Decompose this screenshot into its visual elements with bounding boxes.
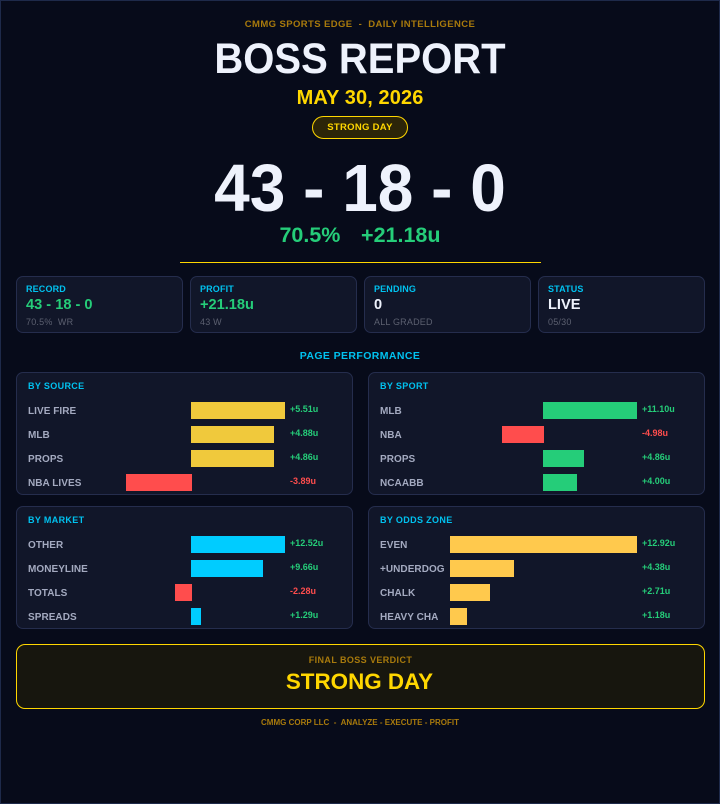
- verdict banner: [16, 644, 705, 709]
- panel: by source: -3.89u: [290, 476, 316, 486]
- panel: by sport: -4.98u: [642, 428, 668, 438]
- stat card: status: [538, 276, 705, 333]
- panel: by source: MLB: [28, 430, 50, 441]
- panel: by sport: [368, 372, 705, 495]
- panel: by odds zone: +1.18u: [642, 610, 670, 620]
- panel: by odds zone: +4.38u: [642, 562, 670, 572]
- panel: by source: +4.86u: [290, 452, 318, 462]
- panel: by sport: +11.10u: [642, 404, 675, 414]
- panel: by market: TOTALS: [28, 588, 67, 599]
- stat card: profit: [190, 276, 357, 333]
- badge: Strong Day: STRONG DAY: [327, 122, 393, 133]
- panel: by source: BY SOURCE: [28, 381, 84, 391]
- headline win rate and profit: 70.5% +21.18u: [279, 223, 441, 247]
- stat card: pending: 0: [374, 297, 382, 313]
- panel: by odds zone: HEAVY CHA: [380, 612, 438, 623]
- panel: by market: -2.28u: [290, 586, 316, 596]
- panel: by odds zone: BY ODDS ZONE: [380, 515, 453, 525]
- stat card: profit: PROFIT: [200, 284, 234, 294]
- stat card: status: LIVE: [548, 297, 580, 313]
- panel: by source: NBA LIVES: [28, 478, 81, 489]
- panel: by odds zone: [368, 506, 705, 629]
- stat card: record: RECORD: [26, 284, 66, 294]
- stat card: status: STATUS: [548, 284, 584, 294]
- gold divider: [180, 262, 541, 263]
- panel: by sport: NCAABB: [380, 478, 424, 489]
- panel: by sport: BY SPORT: [380, 381, 429, 391]
- panel: by market: SPREADS: [28, 612, 77, 623]
- panel: by sport: +4.86u: [642, 452, 670, 462]
- panel: by odds zone: EVEN: [380, 540, 407, 551]
- stat card: profit: +21.18u: [200, 297, 254, 313]
- stat card: status: 05/30: [548, 317, 572, 327]
- eyebrow: CMMG Sports Edge: CMMG SPORTS EDGE - DAILY INTELLIGENCE: [245, 19, 475, 30]
- panel: by sport: MLB: [380, 406, 402, 417]
- panel: by market: +9.66u: [290, 562, 318, 572]
- panel: by market: +12.52u: [290, 538, 323, 548]
- panel: by odds zone: +2.71u: [642, 586, 670, 596]
- verdict label: FINAL BOSS VERDICT: [309, 655, 412, 665]
- stat card: pending: PENDING: [374, 284, 416, 294]
- panel: by odds zone: CHALK: [380, 588, 415, 599]
- footer: CMMG CORP LLC - ANALYZE - EXECUTE - PROFIT: [261, 718, 459, 727]
- panel: by source: LIVE FIRE: [28, 406, 76, 417]
- panel: by odds zone: +UNDERDOG: [380, 564, 445, 575]
- stat card: record: [16, 276, 183, 333]
- panel: by odds zone: +12.92u: [642, 538, 675, 548]
- panel: by sport: NBA: [380, 430, 402, 441]
- verdict text: STRONG DAY: [286, 669, 433, 694]
- panel: by source: +4.88u: [290, 428, 318, 438]
- headline record: 43 - 18 - 0: [214, 150, 506, 226]
- panel: by sport: PROPS: [380, 454, 415, 465]
- stat card: record: 70.5% WR: [26, 317, 73, 327]
- panel: by market: BY MARKET: [28, 515, 84, 525]
- stat card: pending: [364, 276, 531, 333]
- panel: by market: MONEYLINE: [28, 564, 88, 575]
- panel: by market: +1.29u: [290, 610, 318, 620]
- panel: by source: [16, 372, 353, 495]
- stat card: pending: ALL GRADED: [374, 317, 433, 327]
- badge: Strong Day: [312, 116, 408, 139]
- panel: by source: PROPS: [28, 454, 63, 465]
- panel: by sport: +4.00u: [642, 476, 670, 486]
- date: MAY 30, 2026: [297, 87, 423, 109]
- panel: by source: +5.51u: [290, 404, 318, 414]
- stat card: record: 43 - 18 - 0: [26, 297, 93, 313]
- stat card: profit: 43 W: [200, 317, 222, 327]
- section heading: page performance: PAGE PERFORMANCE: [300, 350, 420, 362]
- panel: by market: [16, 506, 353, 629]
- panel: by market: OTHER: [28, 540, 63, 551]
- title: Boss Report: BOSS REPORT: [214, 36, 506, 82]
